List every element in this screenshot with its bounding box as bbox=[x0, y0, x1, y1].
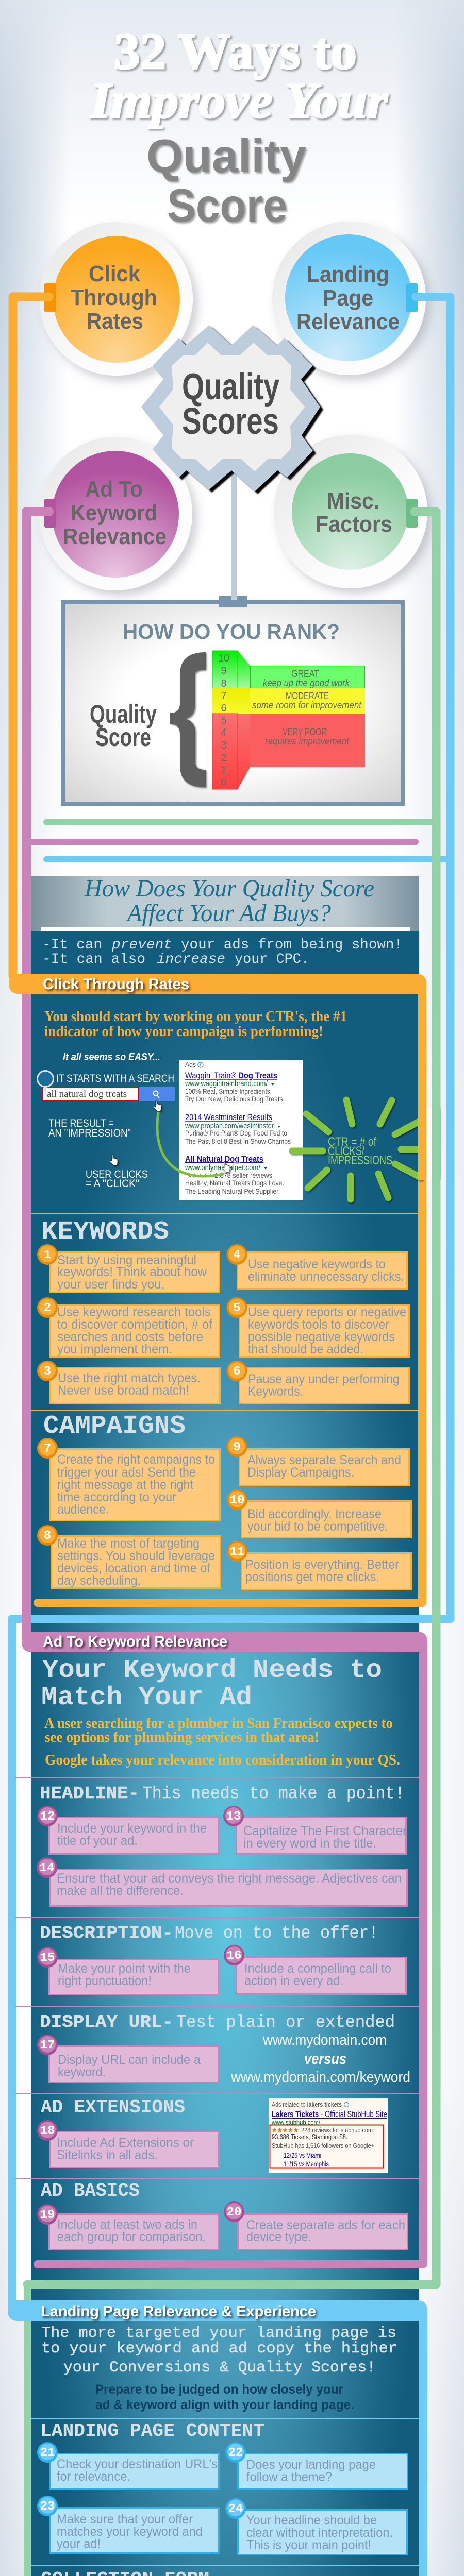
tip 13: in every word in the title. bbox=[243, 1836, 376, 1851]
text block: landing page intro: to your keyword and ad copy the higher bbox=[41, 2340, 397, 2358]
tip 5: that should be added. bbox=[248, 1342, 363, 1357]
tip 7: time according to your bbox=[57, 1490, 176, 1504]
tip 12 bbox=[37, 1806, 219, 1854]
tip 2: Use keyword research tools bbox=[57, 1305, 211, 1319]
ad results panel: 100% Real, Simple Ingredients. bbox=[185, 1087, 272, 1095]
connector: ad to keyword line bbox=[26, 512, 416, 1634]
score scale: 10 bbox=[218, 653, 229, 664]
rating: moderate: MODERATE bbox=[286, 691, 329, 702]
ad results panel: Ads bbox=[185, 1060, 196, 1069]
tip 22: follow a theme? bbox=[246, 2470, 332, 2484]
tip 4: 4 bbox=[233, 1248, 241, 1262]
text block: relevance intro bbox=[44, 1716, 400, 1768]
tip 12: 12 bbox=[40, 1810, 55, 1824]
tip 10: Bid accordingly. Increase bbox=[247, 1507, 382, 1521]
tip 6: Keywords. bbox=[248, 1384, 303, 1399]
tip 22 bbox=[225, 2442, 407, 2489]
tip 17: 17 bbox=[40, 2039, 55, 2053]
ad results panel: Waggin' Train® Dog Treats bbox=[185, 1071, 277, 1080]
score scale: 5 bbox=[221, 715, 227, 726]
tip 9 bbox=[227, 1436, 409, 1486]
ad extension example: Lakers Tickets - Official StubHub Site bbox=[272, 2109, 387, 2120]
tip 10: 10 bbox=[230, 1494, 244, 1507]
heading: campaigns: CAMPAIGNS bbox=[43, 1412, 186, 1441]
text block: landing page intro: Prepare to be judged on how closely your bbox=[95, 2382, 343, 2397]
tip 5: 5 bbox=[233, 1301, 241, 1315]
heading panel: how does your quality score affect your ad buys bbox=[31, 875, 419, 931]
tip 13: 13 bbox=[226, 1810, 241, 1824]
ctr diagram: search flow: USER CLICKS bbox=[86, 1168, 148, 1180]
tip 21: 21 bbox=[40, 2446, 55, 2460]
tip 7: audience. bbox=[57, 1502, 109, 1517]
icon: magnifier bbox=[37, 1071, 54, 1096]
tip 12: Include your keyword in the bbox=[57, 1821, 207, 1836]
quality score label bbox=[90, 700, 157, 752]
tip 20: 20 bbox=[227, 2206, 241, 2219]
icon: hand cursor bbox=[223, 1161, 230, 1172]
quality scores badge: Scores bbox=[182, 401, 279, 442]
ctr intro text: You should start by working on your CTR's, the #1 bbox=[44, 1009, 347, 1025]
text block: effects on ad buys: prevent bbox=[111, 937, 172, 953]
ad results panel: www.waggintrainbrand.com/ bbox=[185, 1079, 268, 1088]
search box bbox=[42, 1087, 175, 1101]
tip 7: right message at the right bbox=[57, 1478, 193, 1492]
circle: ad to keyword relevance bbox=[39, 437, 192, 590]
rating: very poor: requires improvement bbox=[265, 736, 350, 747]
tip 3: 3 bbox=[44, 1365, 51, 1379]
heading: description: Move on to the offer! bbox=[175, 1924, 378, 1943]
ad results panel: The Leading Natural Pet Supplier. bbox=[185, 1187, 280, 1195]
title: Improve Your bbox=[90, 73, 388, 129]
score scale: 7 bbox=[221, 690, 227, 702]
score scale: 2 bbox=[221, 752, 227, 764]
tip 5 bbox=[227, 1297, 409, 1357]
tip 14: make all the difference. bbox=[57, 1884, 184, 1898]
tip 24 bbox=[225, 2498, 407, 2554]
tip 23: Make sure that your offer bbox=[57, 2512, 193, 2527]
tip 8: 8 bbox=[44, 1529, 51, 1543]
quality scores badge bbox=[141, 325, 323, 494]
tip 19: Include at least two ads in bbox=[57, 2217, 197, 2232]
tip 13: Capitalize The First Character bbox=[243, 1824, 407, 1838]
tip 14 bbox=[37, 1857, 407, 1906]
tip 21: Check your destination URL's bbox=[57, 2457, 218, 2471]
tip 19 bbox=[37, 2204, 219, 2249]
heading: landing page content: LANDING PAGE CONTENT bbox=[40, 2420, 264, 2442]
text block: effects on ad buys: your CPC. bbox=[235, 952, 309, 968]
score scale: 3 bbox=[221, 740, 227, 751]
rank heading: HOW DO YOU RANK? bbox=[123, 620, 340, 643]
url comparison bbox=[230, 2032, 410, 2086]
rating: great: keep up the good work bbox=[263, 678, 350, 689]
tip 24: Your headline should be bbox=[246, 2513, 377, 2528]
panel tab bbox=[219, 596, 247, 607]
heading: ad basics: AD BASICS bbox=[41, 2180, 140, 2201]
ad results panel: Healthy, Natural Treats Dogs Love. bbox=[185, 1179, 284, 1187]
heading: display url bbox=[40, 2013, 395, 2032]
tip 1: 1 bbox=[44, 1248, 51, 1262]
tip 1: keywords! Think about how bbox=[57, 1265, 207, 1279]
tip 24: 24 bbox=[228, 2502, 243, 2516]
frame repaint over burst rays bbox=[418, 1108, 441, 1180]
heading: headline: This needs to make a point! bbox=[142, 1784, 405, 1803]
title: Quality bbox=[146, 130, 306, 182]
tip 2: you implement them. bbox=[57, 1342, 172, 1357]
search box: all natural dog treats bbox=[47, 1089, 127, 1099]
tip 22: 22 bbox=[228, 2446, 243, 2460]
tip 7: Create the right campaigns to bbox=[57, 1452, 215, 1467]
rating: very poor: VERY POOR bbox=[283, 727, 327, 738]
ctr diagram: search flow bbox=[37, 1052, 175, 1190]
tip 5: keywords tools to discover bbox=[248, 1317, 389, 1332]
tip 1 bbox=[37, 1244, 220, 1292]
icon: hand cursor bbox=[154, 1100, 161, 1111]
tip 6: 6 bbox=[233, 1365, 241, 1379]
text block: landing page intro: your Conversions & Quality Scores! bbox=[63, 2359, 376, 2377]
circle: landing page relevance: Relevance bbox=[296, 309, 400, 334]
heading panel: how does your quality score affect your ad buys: Affect Your Ad Buys? bbox=[126, 900, 331, 927]
text block: landing page intro bbox=[41, 2325, 397, 2412]
connector: badge to rank panel bbox=[231, 464, 237, 599]
tip 3: Never use broad match! bbox=[58, 1383, 189, 1398]
ctr formula burst: CLICKS/ bbox=[328, 1144, 364, 1158]
circle: misc factors bbox=[274, 435, 427, 588]
section frame: ad to keyword relevance bbox=[22, 1632, 427, 2268]
circle: landing page relevance bbox=[272, 222, 426, 375]
text block: landing page intro: The more targeted your landing page is bbox=[41, 2325, 396, 2342]
ctr formula burst bbox=[292, 1100, 428, 1199]
ctr diagram: search flow: IT STARTS WITH A SEARCH bbox=[56, 1073, 174, 1084]
quality score label: Quality bbox=[90, 700, 157, 728]
text block: effects on ad buys: increase bbox=[157, 952, 225, 968]
tip 9: 9 bbox=[233, 1440, 241, 1454]
tip 18: Include Ad Extensions or bbox=[57, 2136, 194, 2150]
section frame: landing page relevance and experience bbox=[8, 2300, 427, 2576]
tip 14: Ensure that your ad conveys the right message. Adjectives can bbox=[57, 1871, 402, 1886]
title: Score bbox=[167, 180, 287, 232]
ad extension example: Ads related to lakers tickets bbox=[272, 2100, 342, 2108]
heading: display url: Test plain or extended bbox=[176, 2013, 395, 2032]
circle: misc factors: Factors bbox=[316, 512, 392, 537]
tip 4: Use negative keywords to bbox=[248, 1257, 386, 1272]
heading panel: how does your quality score affect your ad buys: How Does Your Quality Score bbox=[84, 875, 374, 902]
tip 11: positions get more clicks. bbox=[245, 1570, 379, 1584]
rating: great bbox=[251, 666, 365, 689]
tip 23: your ad! bbox=[57, 2537, 101, 2551]
section frame: click through rates bbox=[9, 974, 426, 1607]
tip 11: 11 bbox=[230, 1545, 244, 1559]
tip 19: 19 bbox=[40, 2208, 55, 2222]
ad extension example: www.stubhub.com/ bbox=[271, 2118, 320, 2126]
url comparison: www.mydomain.com/keyword bbox=[230, 2069, 410, 2086]
tip 13 bbox=[223, 1806, 407, 1854]
tip 16: Include a compelling call to bbox=[244, 1961, 391, 1976]
score scale: 9 bbox=[221, 665, 227, 676]
ctr intro text: indicator of how your campaign is performing! bbox=[44, 1024, 323, 1040]
text block: effects on ad buys bbox=[42, 937, 403, 968]
tip 1: your user finds you. bbox=[57, 1277, 164, 1292]
tip 22: Does your landing page bbox=[246, 2458, 376, 2472]
tip 17: Display URL can include a bbox=[58, 2053, 201, 2067]
url comparison: www.mydomain.com bbox=[262, 2032, 387, 2048]
ctr formula burst: CTR = # of bbox=[328, 1135, 376, 1149]
tip 19: each group for comparison. bbox=[57, 2230, 206, 2244]
circle: ad to keyword relevance: Relevance bbox=[63, 524, 167, 549]
tip 17 bbox=[37, 2035, 219, 2082]
tip 16: 16 bbox=[227, 1949, 241, 1963]
ad extension example: 93,686 Tickets, Starting at $8. bbox=[272, 2133, 347, 2141]
score scale: 0 bbox=[221, 777, 227, 788]
tip 2: searches and costs before bbox=[57, 1330, 203, 1344]
tip 21: for relevance. bbox=[57, 2469, 130, 2484]
connector: misc line bbox=[27, 512, 436, 2576]
ad results panel: Purina® Pro Plan® Dog Food Fed to bbox=[185, 1129, 287, 1137]
ad results panel: All Natural Dog Treats bbox=[185, 1154, 263, 1164]
tip 7: 7 bbox=[44, 1442, 51, 1456]
circle: landing page relevance: Landing bbox=[307, 262, 389, 287]
tip 20: Create separate ads for each bbox=[246, 2218, 405, 2232]
tip 8: day scheduling. bbox=[57, 1573, 141, 1588]
tip 1: Start by using meaningful bbox=[57, 1253, 196, 1267]
tip 12: title of your ad. bbox=[57, 1834, 138, 1848]
url comparison: versus bbox=[304, 2050, 346, 2067]
connector: landing page line bbox=[12, 297, 451, 2303]
heading: display url: DISPLAY URL- bbox=[40, 2013, 173, 2032]
ad extension example bbox=[269, 2098, 388, 2173]
ad results panel: 2014 Westminster Results bbox=[185, 1112, 272, 1122]
tip 8: settings. You should leverage bbox=[57, 1549, 215, 1563]
ad extension example: StubHub has 1,616 followers on Google+ bbox=[272, 2142, 374, 2149]
ctr intro text bbox=[44, 1009, 347, 1040]
tip 9: Always separate Search and bbox=[247, 1453, 401, 1467]
tip 24: This is your main point! bbox=[246, 2538, 371, 2552]
ad extension example: ★★★★★ bbox=[272, 2126, 299, 2134]
tip 5: Use query reports or negative bbox=[248, 1305, 406, 1319]
icon: brace bbox=[170, 652, 206, 787]
ctr diagram: search flow: AN "IMPRESSION" bbox=[48, 1127, 131, 1139]
heading: description bbox=[40, 1924, 378, 1943]
circle: misc factors: Misc. bbox=[327, 488, 379, 514]
tip 11: Position is everything. Better bbox=[245, 1557, 399, 1572]
heading: keywords: KEYWORDS bbox=[41, 1217, 169, 1247]
score scale: 1 bbox=[221, 765, 227, 776]
tip 2: to discover competition, # of bbox=[57, 1317, 212, 1332]
ad extension example: 11/15 vs Memphis bbox=[284, 2160, 329, 2168]
ctr diagram: search flow: = A "CLICK" bbox=[86, 1178, 139, 1190]
circle: click through rates: Through bbox=[71, 285, 157, 310]
tip 14: 14 bbox=[40, 1861, 54, 1875]
text block: effects on ad buys: -It can also bbox=[42, 952, 145, 968]
ctr diagram: search flow: It all seems so EASY... bbox=[63, 1052, 160, 1063]
section frame: ad to keyword relevance: Ad To Keyword Relevance bbox=[43, 1633, 227, 1650]
ad results panel: Try Our New, Delicious Dog Treats. bbox=[185, 1095, 285, 1103]
ad results panel: www.proplan.com/westminster bbox=[185, 1122, 274, 1130]
tip 15 bbox=[37, 1947, 219, 1995]
heading: your keyword needs to match your ad bbox=[41, 1656, 382, 1713]
tip 6: Pause any under performing bbox=[248, 1372, 400, 1386]
tip 9: Display Campaigns. bbox=[247, 1465, 354, 1480]
connector: click through line bbox=[13, 297, 49, 976]
tip 10 bbox=[227, 1489, 411, 1537]
rating: moderate bbox=[250, 688, 365, 714]
heading: your keyword needs to match your ad: Your Keyword Needs to bbox=[42, 1656, 382, 1685]
rating: great: GREAT bbox=[291, 669, 319, 680]
tip 18 bbox=[37, 2120, 219, 2168]
rating: very poor bbox=[250, 714, 365, 767]
ad results panel: i bbox=[200, 1063, 201, 1067]
title bbox=[90, 23, 388, 232]
text block: effects on ad buys: -It can bbox=[42, 937, 102, 953]
tip 3: Use the right match types. bbox=[58, 1371, 201, 1385]
tip 23: matches your keyword and bbox=[57, 2524, 203, 2539]
tip 16 bbox=[224, 1945, 406, 1994]
tip 16: action in every ad. bbox=[244, 1974, 343, 1988]
tip 15: right punctuation! bbox=[58, 1974, 152, 1988]
tip 7 bbox=[37, 1438, 220, 1521]
text block: relevance intro: A user searching for a plumber in San Francisco expects to bbox=[44, 1716, 393, 1732]
ad results panel: 1,878 seller reviews bbox=[214, 1171, 272, 1179]
tip 17: keyword. bbox=[58, 2065, 106, 2079]
tip 18: Sitelinks in all ads. bbox=[57, 2148, 158, 2162]
score scale bbox=[212, 651, 250, 789]
tip 23 bbox=[37, 2496, 219, 2553]
tip 15: Make your point with the bbox=[58, 1961, 191, 1976]
tip 8 bbox=[37, 1525, 221, 1588]
ctr diagram: search flow: THE RESULT = bbox=[48, 1117, 114, 1129]
score scale: 8 bbox=[221, 678, 227, 689]
quality scores badge: Quality bbox=[182, 366, 279, 408]
title: 32 Ways to bbox=[114, 23, 357, 80]
circle: landing page relevance: Page bbox=[323, 285, 373, 311]
tip 4 bbox=[227, 1244, 407, 1289]
text block: relevance intro: see options for plumbing services in that area! bbox=[45, 1730, 319, 1745]
tip 4: eliminate unnecessary clicks. bbox=[248, 1269, 404, 1284]
heading: headline bbox=[40, 1784, 405, 1803]
ad extension example: 228 reviews for stubhub.com bbox=[301, 2126, 373, 2134]
tip 2 bbox=[37, 1297, 220, 1357]
tip 6 bbox=[227, 1361, 409, 1403]
main dark teal panel bbox=[16, 931, 419, 2576]
ad results panel: ★★★★★ bbox=[187, 1172, 213, 1179]
arrow: curved green line to clicked ad bbox=[157, 1113, 230, 1176]
tip 10: your bid to be competitive. bbox=[247, 1519, 388, 1534]
ctr formula burst: IMPRESSIONS bbox=[328, 1154, 392, 1167]
tip 3 bbox=[37, 1361, 220, 1403]
tip 7: trigger your ads! Send the bbox=[57, 1465, 196, 1480]
rating: moderate: some room for improvement bbox=[252, 700, 362, 711]
tip 8: Make the most of targeting bbox=[57, 1536, 200, 1551]
circle: click through rates: Click bbox=[89, 261, 140, 286]
circle: ad to keyword relevance: Ad To bbox=[85, 477, 143, 502]
text block: effects on ad buys: your ads from being shown! bbox=[181, 937, 403, 953]
ad results panel bbox=[179, 1060, 303, 1200]
circle: click through rates: Rates bbox=[87, 309, 143, 334]
tip 23: 23 bbox=[40, 2500, 55, 2514]
section frame: click through rates: Click Through Rates bbox=[43, 976, 189, 993]
ad extension example: 12/25 vs Miami bbox=[284, 2151, 321, 2159]
tip 18: 18 bbox=[40, 2124, 55, 2138]
section frame: landing page relevance and experience: Landing Page Relevance & Experience bbox=[41, 2303, 316, 2320]
tip 21 bbox=[37, 2442, 219, 2489]
panel: how do you rank bbox=[63, 596, 403, 804]
text block: relevance intro: Google takes your relevance into consideration in your QS. bbox=[45, 1752, 400, 1768]
tip 20 bbox=[224, 2201, 407, 2249]
tip 24: clear without interpretation. bbox=[246, 2526, 393, 2540]
text block: landing page intro: ad & keyword align with your landing page. bbox=[95, 2398, 354, 2412]
tip 5: possible negative keywords bbox=[248, 1330, 395, 1344]
ad results panel: The Past 8 of 8 Best In Show Champs bbox=[185, 1137, 291, 1145]
tip 8: devices, location and time of bbox=[57, 1561, 210, 1575]
heading: your keyword needs to match your ad: Match Your Ad bbox=[41, 1683, 252, 1713]
tip 11 bbox=[227, 1541, 411, 1590]
tip 2: 2 bbox=[44, 1301, 51, 1315]
heading: description: DESCRIPTION- bbox=[40, 1924, 173, 1943]
circle: ad to keyword relevance: Keyword bbox=[71, 500, 157, 526]
tip 15: 15 bbox=[40, 1951, 55, 1965]
score scale: 4 bbox=[221, 727, 227, 738]
heading: ad extensions: AD EXTENSIONS bbox=[41, 2097, 185, 2118]
tip 20: device type. bbox=[246, 2230, 311, 2244]
heading: headline: HEADLINE- bbox=[40, 1784, 139, 1803]
circle: click through rates bbox=[39, 222, 193, 376]
ad results panel: www.onlynaturalpet.com/ bbox=[185, 1163, 261, 1172]
icon: hand cursor bbox=[110, 1155, 118, 1165]
score scale: 6 bbox=[221, 703, 227, 714]
quality score label: Score bbox=[95, 723, 151, 752]
